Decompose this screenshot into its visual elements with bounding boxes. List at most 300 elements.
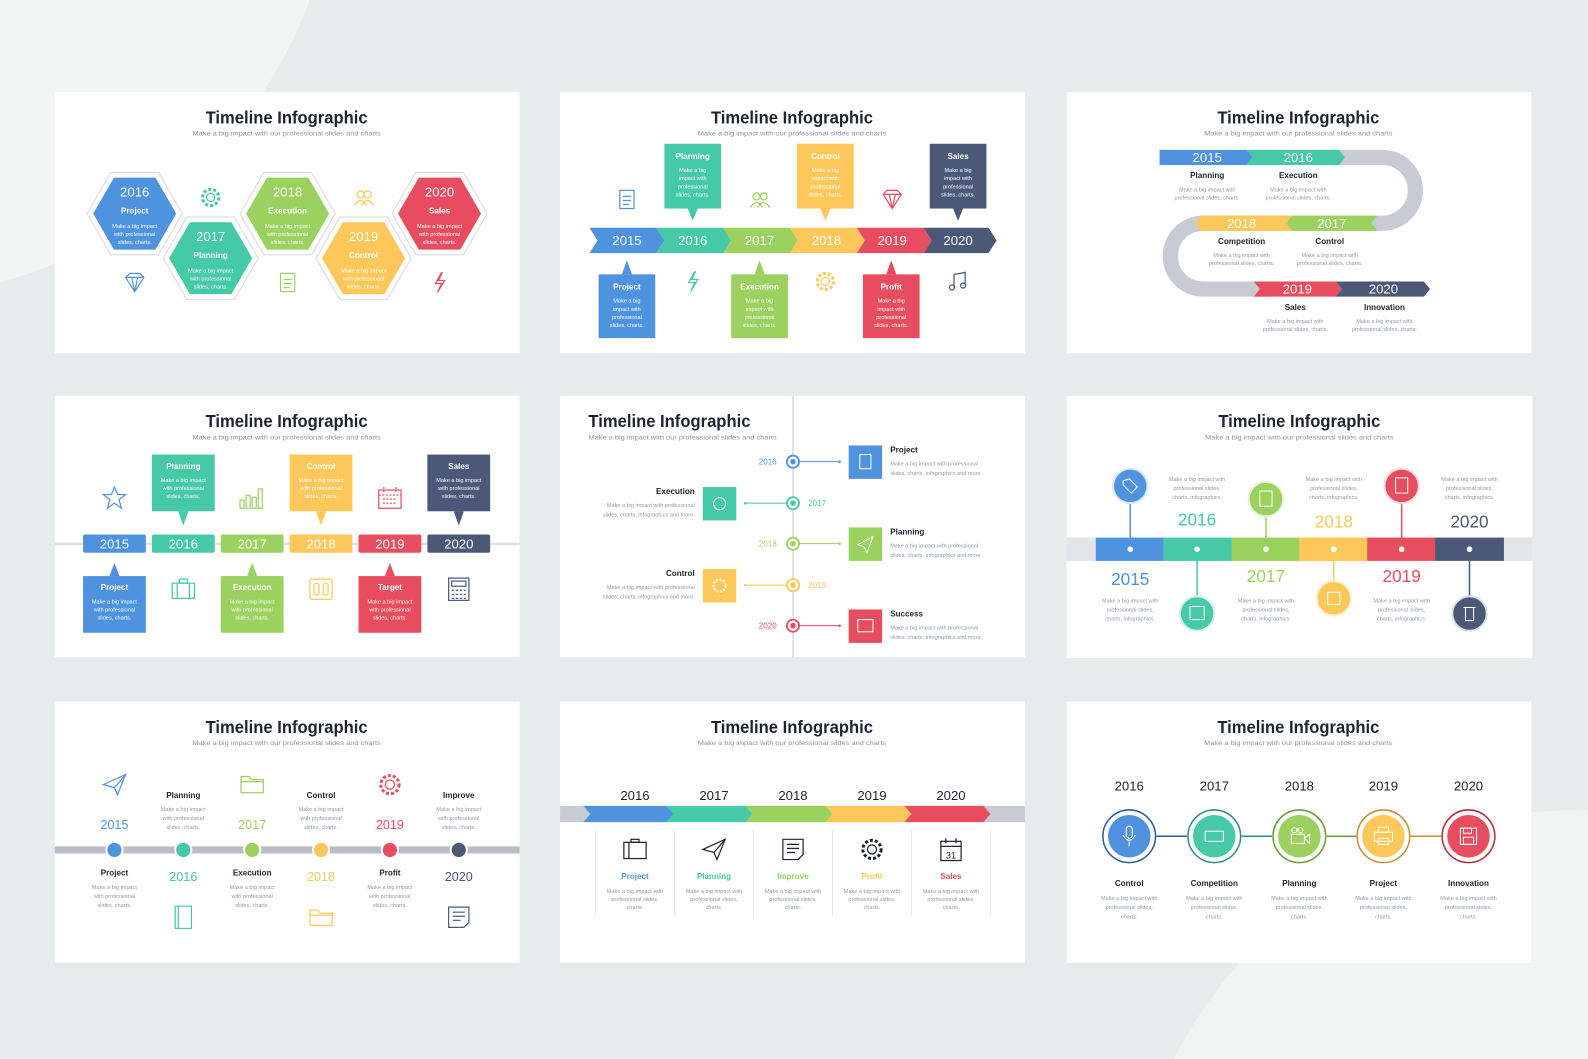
year labels: 2016 — [1178, 509, 1216, 529]
descriptions: professional slides, — [1446, 486, 1494, 492]
label: Innovation: professional slides, charts. — [1352, 327, 1418, 333]
icon: gear — [817, 273, 833, 290]
item 2016 Project: 2016 — [759, 458, 777, 467]
hexagon 2018: Make a big impact — [265, 224, 311, 230]
descriptions: professional slides, — [1242, 608, 1290, 614]
bottom labels: Execution — [233, 869, 272, 878]
label: Sales — [1263, 303, 1328, 333]
item 2018 Planning: slides, charts, infographics and more. — [890, 553, 983, 559]
bottom labels: with professional — [231, 894, 273, 900]
year pills: 2016 — [169, 537, 198, 552]
years: 2017 — [238, 818, 266, 832]
column descriptions: professional slides, — [690, 897, 738, 903]
title: Timeline Infographic — [711, 717, 873, 737]
title: Timeline Infographic — [711, 108, 873, 128]
callout: Sales: Make a big — [944, 168, 972, 174]
years: 2020 — [445, 870, 473, 884]
year labels: 2015 — [1111, 569, 1149, 589]
item 2020 Success: slides, charts, infographics and more. — [890, 635, 983, 641]
arrow band: 2016 — [678, 233, 707, 248]
column descriptions — [607, 889, 979, 911]
callout: Project: Make a big — [613, 299, 640, 305]
title: Timeline Infographic — [588, 411, 751, 431]
descriptions: Make a big impact with — [1306, 477, 1362, 483]
callout: Sales: Sales — [947, 152, 969, 161]
labels: Control — [1115, 879, 1144, 888]
callout: Planning — [664, 144, 721, 221]
column descriptions: professional slides, — [927, 897, 975, 903]
callout: Control: Make a big impact — [299, 478, 344, 484]
segment 2017 — [1286, 216, 1377, 231]
icon: calculator — [449, 578, 469, 600]
item 2019 Control: 2019 — [808, 581, 827, 590]
callout: Planning: slides, charts. — [676, 192, 710, 198]
segment 2016: 2016 — [1284, 150, 1313, 165]
label: Competition: professional slides, charts. — [1209, 261, 1275, 267]
callout: Profit: slides, charts. — [874, 323, 909, 329]
item 2016 Project: slides, charts, infographics and more. — [890, 471, 983, 477]
top labels: Planning — [166, 791, 200, 800]
year pills: 2019 — [375, 537, 405, 552]
labels: Make a big impact with — [1355, 896, 1412, 902]
segment 2016 — [1247, 150, 1345, 165]
bottom labels: with professional — [93, 894, 135, 900]
label: Planning: professional slides, charts. — [1175, 195, 1240, 201]
top labels: Make a big impact — [436, 807, 482, 813]
callout: Project: Make a big impact — [92, 599, 137, 605]
hexagon 2016 — [87, 172, 182, 255]
labels: charts. — [1206, 914, 1223, 920]
label: Sales: Sales — [1285, 303, 1306, 312]
column descriptions: Make a big impact with — [923, 889, 979, 895]
segment 2015: 2015 — [1193, 150, 1222, 165]
panel: dotted line timeline — [55, 702, 520, 963]
year labels: 2019 — [1383, 566, 1421, 586]
descriptions: Make a big impact with — [1169, 477, 1225, 483]
icon: calendar — [379, 487, 401, 508]
labels: Competition — [1191, 879, 1238, 888]
callout: Planning — [152, 455, 215, 525]
arrow band: 2020 — [943, 233, 973, 248]
callout: Planning: Planning — [166, 462, 200, 471]
descriptions: charts, infographics. — [1172, 495, 1222, 501]
icon: bar chart — [240, 489, 262, 508]
callout: Target: Make a big impact — [367, 599, 413, 605]
column labels: Project — [621, 872, 649, 881]
callout: Control: slides, charts. — [304, 494, 338, 500]
hexagon 2016: Make a big impact — [112, 224, 158, 230]
callout: Project — [599, 260, 655, 338]
years: 2020 — [936, 788, 966, 803]
icons row — [624, 838, 961, 861]
callout: Execution: professional — [745, 315, 775, 321]
callout: Planning: with professional — [162, 486, 204, 492]
descriptions: charts, infographics. — [1377, 617, 1427, 623]
callout: Sales — [930, 144, 986, 221]
descriptions — [1102, 477, 1498, 623]
label: Execution: Execution — [1279, 171, 1318, 180]
hexagon 2018 — [240, 172, 335, 255]
callout: Execution — [731, 260, 788, 338]
descriptions: Make a big impact with — [1441, 477, 1498, 483]
road path — [1170, 157, 1415, 289]
pin up: blue tag — [1113, 469, 1147, 538]
column labels — [621, 872, 962, 881]
labels: Make a big impact with — [1101, 896, 1157, 902]
pin down: yellow picture — [1317, 561, 1351, 616]
bottom labels: slides, charts. — [373, 903, 407, 909]
callout: Sales — [427, 455, 490, 525]
years: 2019 — [376, 818, 404, 832]
hexagon 2019: with professional — [342, 276, 384, 282]
callout: Planning: slides, charts. — [166, 494, 201, 500]
year pills: 2015 — [100, 537, 129, 552]
callout: Planning: impact with — [679, 176, 707, 182]
year labels: 2018 — [1315, 511, 1353, 531]
column labels: Improve — [777, 872, 809, 881]
color bar — [1066, 538, 1532, 561]
descriptions: professional slides, — [1173, 486, 1221, 492]
top labels — [161, 791, 482, 831]
item 2018 Planning — [759, 527, 983, 561]
column labels: Planning — [697, 872, 731, 881]
circle: printer — [1357, 810, 1410, 863]
column descriptions: charts. — [706, 905, 723, 911]
year labels: 2020 — [1450, 511, 1489, 531]
bottom labels: with professional — [368, 894, 411, 900]
top labels: with professional — [437, 816, 479, 822]
hexagon 2020 — [392, 172, 487, 255]
hexagon 2017: slides, charts. — [194, 285, 228, 291]
callout: Planning: professional — [678, 184, 708, 190]
years: 2020 — [1454, 779, 1483, 794]
item 2017 Execution: Make a big impact with professional — [607, 503, 695, 509]
years: 2018 — [307, 870, 335, 884]
callout: Control: Control — [811, 152, 840, 161]
icon: people — [354, 191, 374, 206]
callout: Profit: Profit — [881, 283, 902, 292]
callout: Target: with professional — [368, 608, 411, 614]
item 2018 Planning: 2018 — [759, 540, 777, 549]
column descriptions: charts. — [785, 905, 802, 911]
callout: Planning: Make a big — [679, 168, 706, 174]
column descriptions: charts. — [943, 905, 960, 911]
circle: camera — [1273, 810, 1326, 863]
hexagon 2018: 2018 — [273, 184, 302, 199]
labels: professional slides, — [1191, 905, 1238, 911]
hexagon 2019: slides, charts. — [347, 285, 381, 291]
item 2018 Planning: Planning — [890, 528, 924, 537]
label: Planning: Make a big impact with — [1179, 187, 1235, 193]
hexagon 2017: with professional — [189, 276, 231, 282]
subtitle: Make a big impact with our professional slides and charts — [192, 740, 382, 747]
arrow band: 2015 — [612, 233, 642, 248]
hexagon 2017: Planning — [194, 251, 228, 260]
label: Competition: Competition — [1218, 237, 1265, 246]
hexagon 2019: 2019 — [349, 229, 378, 244]
callout: Control: Control — [307, 462, 335, 471]
chevron band — [560, 806, 1025, 822]
callout: Profit: impact with — [877, 307, 905, 313]
callout: Project: slides, charts. — [610, 323, 644, 329]
icon: lightning — [689, 271, 698, 292]
segment 2020 — [1336, 281, 1430, 297]
bottom labels: Make a big impact — [367, 885, 413, 891]
callout: Profit: professional — [876, 315, 906, 321]
segment 2018: 2018 — [1227, 216, 1256, 231]
year pills: 2017 — [238, 537, 267, 552]
segment 2015 — [1160, 150, 1253, 165]
item 2020 Success: 2020 — [759, 622, 777, 631]
callout: Sales: professional — [943, 184, 973, 190]
arrow band: 2018 — [812, 233, 841, 248]
item 2017 Execution: 2017 — [808, 499, 827, 508]
callout: Control — [797, 144, 854, 221]
callout: Project: Project — [613, 283, 641, 292]
years — [1115, 779, 1483, 794]
panel: hexagon timeline — [55, 92, 520, 353]
bottom labels: Make a big impact — [230, 885, 275, 891]
panel: circle icons timeline — [1066, 702, 1531, 963]
segment 2020: 2020 — [1369, 282, 1398, 297]
arrow band: 2017 — [745, 233, 774, 248]
column descriptions: professional slides, — [611, 897, 659, 903]
years: 2019 — [1369, 779, 1398, 794]
callout: Project: slides, charts. — [97, 616, 132, 622]
subtitle: Make a big impact with our professional slides and charts — [192, 434, 382, 441]
years: 2016 — [169, 870, 197, 884]
label: Control — [1297, 237, 1363, 267]
item 2020 Success: Make a big impact with professional — [890, 626, 978, 632]
icon: diamond — [883, 190, 901, 209]
item 2018 Planning: Make a big impact with professional — [890, 544, 978, 550]
callout: Target: slides, charts. — [373, 616, 407, 622]
segment 2017: 2017 — [1317, 216, 1346, 231]
label: Innovation — [1352, 303, 1418, 333]
icon: briefcase — [172, 579, 194, 598]
callout: Project: Project — [101, 583, 128, 592]
callout: Sales: slides, charts. — [442, 494, 476, 500]
callout: Control — [290, 455, 352, 525]
top labels: Improve — [443, 791, 475, 800]
panel: arrow band timeline with callouts — [560, 92, 1025, 353]
column labels: Profit — [861, 872, 883, 881]
hexagon 2019 — [316, 217, 411, 299]
labels — [1101, 879, 1497, 920]
top labels: slides, charts. — [304, 825, 338, 831]
labels: Make a big impact with — [1271, 896, 1328, 902]
hexagon 2018: Execution — [268, 207, 307, 216]
top labels: slides, charts. — [166, 825, 201, 831]
label: Sales: Make a big impact with — [1267, 319, 1324, 325]
pin down: navy trash — [1452, 561, 1487, 631]
callout: Target — [359, 563, 421, 633]
top labels: Control — [307, 791, 335, 800]
callout: Project — [83, 563, 146, 633]
callout: Execution: slides, charts. — [743, 323, 777, 329]
descriptions: charts, infographics. — [1241, 617, 1291, 623]
icon: star — [103, 487, 126, 508]
hexagon 2018: with professional — [266, 232, 308, 238]
item 2019 Control: Make a big impact with professional — [607, 585, 695, 591]
subtitle: Make a big impact with our professional slides and charts — [698, 131, 887, 138]
icon: diamond — [126, 273, 144, 292]
callout: Planning: Make a big impact — [161, 478, 206, 484]
callout: Execution: Execution — [740, 283, 779, 292]
pin up: green doc — [1249, 482, 1283, 538]
label: Execution — [1266, 171, 1331, 201]
segment 2019: 2019 — [1283, 282, 1312, 297]
descriptions: professional slides, — [1107, 608, 1154, 614]
labels: Innovation — [1448, 879, 1489, 888]
label: Execution: professional slides, charts. — [1266, 195, 1331, 201]
column descriptions: charts. — [864, 905, 881, 911]
icon: folder — [241, 777, 263, 793]
descriptions: Make a big impact with — [1238, 598, 1294, 604]
title: Timeline Infographic — [206, 108, 368, 128]
icon: notepad — [620, 190, 634, 209]
years: 2017 — [1200, 779, 1229, 794]
year pills: 2018 — [306, 537, 336, 552]
callout: Execution: impact with — [746, 307, 773, 313]
labels: Planning — [1282, 879, 1317, 888]
labels: professional slides, — [1276, 905, 1323, 911]
labels: Make a big impact with — [1186, 896, 1243, 902]
icon: gear — [381, 776, 399, 794]
circle: microphone — [1103, 810, 1156, 863]
item 2016 Project: Project — [890, 446, 918, 455]
title: Timeline Infographic — [1218, 411, 1381, 431]
column descriptions: Make a big impact with — [844, 889, 900, 895]
label: Control: Control — [1315, 237, 1344, 246]
icons row: 31 — [946, 851, 956, 861]
dots — [106, 842, 467, 858]
callout: Sales: with professional — [437, 486, 479, 492]
year labels: 2017 — [1247, 566, 1285, 586]
callout: Execution: Make a big impact — [230, 599, 275, 605]
column descriptions: charts. — [627, 905, 644, 911]
hexagon 2016: slides, charts. — [118, 240, 152, 246]
callout: Control: with professional — [299, 486, 342, 492]
column descriptions: Make a big impact with — [607, 889, 663, 895]
descriptions: professional slides, — [1310, 486, 1358, 492]
years: 2019 — [857, 788, 887, 803]
item 2016 Project — [759, 445, 983, 479]
callout: Sales: impact with — [944, 176, 972, 182]
callout: Planning: Planning — [676, 152, 710, 161]
icon: notepad — [281, 273, 295, 292]
panel: pill timeline with callouts — [55, 396, 520, 657]
item 2017 Execution: Execution — [656, 487, 695, 496]
arrow band: 2019 — [878, 233, 907, 248]
top labels: slides, charts. — [442, 825, 476, 831]
bottom labels: Project — [101, 869, 128, 878]
column descriptions: Make a big impact with — [686, 889, 742, 895]
top labels: Make a big impact — [161, 807, 206, 813]
panel: chevron columns timeline — [560, 702, 1025, 963]
labels: charts. — [1291, 914, 1308, 920]
labels: charts. — [1121, 914, 1138, 920]
column descriptions: professional slides, — [769, 897, 817, 903]
callout: Control: Make a big — [812, 168, 839, 174]
years — [100, 818, 473, 884]
item 2017 Execution: slides, charts, infographics and more. — [603, 512, 695, 518]
title: Timeline Infographic — [1217, 108, 1380, 128]
callout: Project: with professional — [93, 608, 135, 614]
callout: Sales: Make a big impact — [436, 478, 482, 484]
years: 2016 — [620, 788, 650, 803]
top labels: Make a big impact — [299, 807, 344, 813]
label: Competition: Make a big impact with — [1213, 253, 1270, 259]
subtitle: Make a big impact with our professional slides and charts — [698, 740, 887, 747]
hexagon 2019: Make a big impact — [341, 268, 387, 274]
segment 2019 — [1254, 281, 1342, 297]
label: Innovation: Make a big impact with — [1356, 319, 1413, 325]
pin down: teal calendar — [1180, 561, 1214, 631]
panel: bar with pins timeline — [1066, 396, 1532, 658]
icon: notebook — [175, 906, 191, 928]
labels: charts. — [1375, 914, 1392, 920]
labels: charts. — [1460, 914, 1477, 920]
descriptions: Make a big impact with — [1373, 598, 1430, 604]
hexagon 2016: Project — [121, 207, 149, 216]
bottom labels: slides, charts. — [235, 903, 270, 909]
hexagon 2020: slides, charts. — [423, 240, 457, 246]
labels: professional slides, — [1445, 905, 1493, 911]
label: Sales: professional slides, charts. — [1263, 327, 1328, 333]
panel: serpentine road timeline — [1066, 92, 1531, 353]
years: 2018 — [778, 788, 808, 803]
panel: vertical timeline — [560, 396, 1025, 657]
icon: gear — [203, 189, 219, 206]
years: 2015 — [100, 818, 129, 832]
icon: folder — [310, 910, 332, 925]
column descriptions: Make a big impact with — [765, 889, 821, 895]
callout: Profit: Make a big — [878, 299, 905, 305]
label: Control: Make a big impact with — [1302, 253, 1358, 259]
descriptions: professional slides, — [1378, 608, 1426, 614]
years — [620, 788, 966, 803]
years: 2017 — [699, 788, 729, 803]
callout: Project: professional — [612, 315, 642, 321]
column descriptions: professional slides, — [848, 897, 896, 903]
callout: Execution: Execution — [233, 583, 272, 592]
hexagon 2016: 2016 — [120, 184, 149, 199]
arrow band — [589, 228, 997, 253]
circle: battery — [1188, 810, 1241, 863]
column labels: Sales — [940, 872, 962, 881]
hexagon 2017: Make a big impact — [188, 268, 234, 274]
label: Planning — [1175, 171, 1240, 201]
icon: music note — [949, 272, 966, 290]
item 2019 Control: Control — [666, 569, 695, 578]
item 2019 Control — [603, 569, 827, 602]
callout: Project: impact with — [613, 307, 641, 313]
title: Timeline Infographic — [1217, 717, 1380, 737]
labels: professional slides, — [1360, 905, 1407, 911]
subtitle: Make a big impact with our professional slides and charts — [192, 131, 382, 138]
labels: Make a big impact with — [1440, 896, 1497, 902]
pin up: red book — [1384, 469, 1419, 538]
subtitle: Make a big impact with our professional slides and charts — [1204, 131, 1393, 138]
callout: Execution: Make a big — [746, 299, 773, 305]
item 2016 Project: Make a big impact with professional — [890, 462, 978, 468]
label: Innovation: Innovation — [1364, 303, 1405, 312]
year pills — [83, 535, 490, 553]
hexagon 2017 — [163, 217, 258, 299]
hexagon 2018: slides, charts. — [271, 240, 305, 246]
year pills: 2020 — [444, 537, 473, 552]
